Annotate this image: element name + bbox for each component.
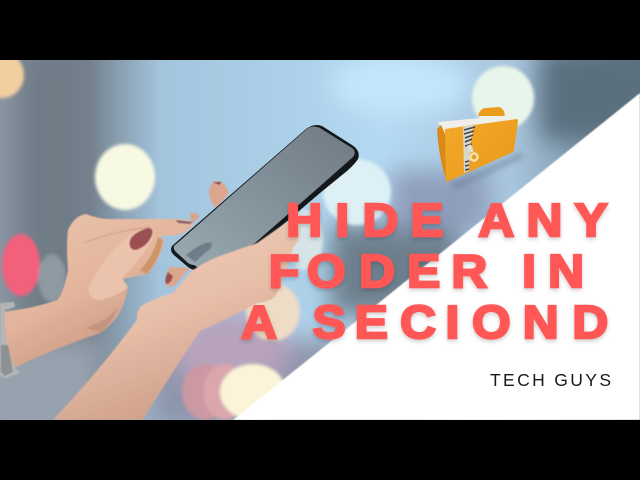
brand label: TECH GUYS	[490, 370, 611, 390]
title: three lines	[241, 196, 608, 349]
fingertip nail	[176, 220, 193, 224]
thumb	[88, 228, 153, 300]
title line 1: HIDE ANY	[286, 196, 608, 247]
thumb nail	[130, 228, 152, 250]
smartphone	[171, 125, 359, 275]
bokeh circles	[0, 52, 534, 420]
curled finger	[140, 237, 163, 274]
title line 3: A SECIOND	[241, 298, 608, 349]
title line 2: FODER IN	[269, 247, 584, 298]
back fingers behind phone	[165, 181, 229, 287]
icon: zipped yellow folder	[437, 107, 524, 190]
bottom letterbox bar	[0, 420, 640, 480]
folder soft shadow	[450, 152, 524, 190]
left hand with pointing finger	[3, 214, 193, 369]
wristwatch bracelet	[0, 302, 20, 378]
white diagonal panel	[233, 93, 640, 420]
right hand and forearm	[53, 222, 300, 420]
thumbnail canvas	[0, 60, 640, 420]
zipper	[463, 124, 478, 173]
top letterbox bar	[0, 0, 640, 60]
